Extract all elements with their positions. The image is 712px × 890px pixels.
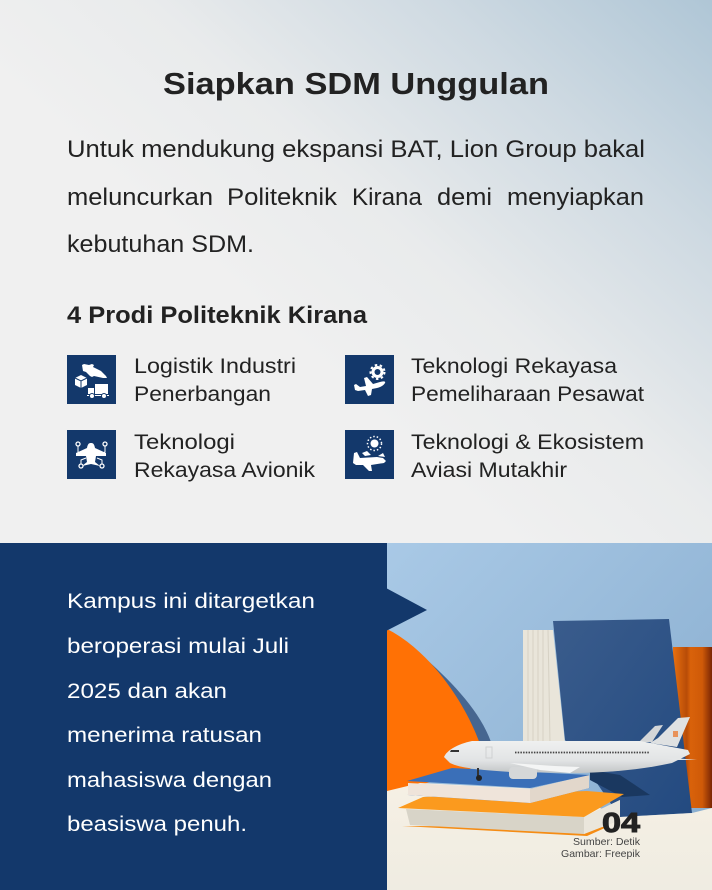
intro text block: Kirana xyxy=(352,184,422,211)
orange paper folds xyxy=(673,647,712,808)
label xyxy=(134,355,296,406)
label: Teknologi & Ekosistem xyxy=(411,431,644,454)
icon: plane, box and truck xyxy=(67,355,116,404)
source credits xyxy=(561,836,641,860)
heading: 4 prodi: 4 Prodi Politeknik Kirana xyxy=(67,302,368,329)
intro text block: Politeknik xyxy=(227,184,338,211)
callout text: 2025 dan akan xyxy=(67,679,227,703)
table xyxy=(387,783,712,890)
intro text block: Untuk mendukung ekspansi BAT, Lion Group bakal xyxy=(67,136,645,163)
item: Teknologi & Ekosistem Aviasi Mutakhir xyxy=(345,430,644,482)
item: Logistik Industri Penerbangan xyxy=(67,355,296,406)
airplane xyxy=(444,717,697,781)
photo wall xyxy=(387,543,712,890)
intro text block: meluncurkan xyxy=(67,184,213,211)
callout text xyxy=(67,589,315,836)
intro text block: demi xyxy=(437,184,492,211)
item: Teknologi Rekayasa Pemeliharaan Pesawat xyxy=(345,355,644,406)
label: Aviasi Mutakhir xyxy=(411,459,567,482)
callout arrow xyxy=(386,588,427,631)
icon: plane and light bulb xyxy=(345,430,394,479)
item: Teknologi Rekayasa Avionik xyxy=(67,430,316,482)
label: Rekayasa Avionik xyxy=(134,459,316,482)
page number: 04 xyxy=(602,807,641,838)
label: Penerbangan xyxy=(134,383,271,406)
label xyxy=(411,355,644,406)
photo: model plane on books xyxy=(387,543,712,890)
intro text block: menyiapkan xyxy=(507,184,644,211)
title: Siapkan SDM Unggulan xyxy=(163,66,549,101)
upper blue book xyxy=(407,768,590,803)
icon: plane and gear xyxy=(345,355,394,404)
label xyxy=(134,431,316,482)
label: Pemeliharaan Pesawat xyxy=(411,383,644,406)
orange arch with shadow xyxy=(387,629,491,795)
intro text block: kebutuhan SDM. xyxy=(67,231,254,258)
panel: navy callout xyxy=(0,543,427,890)
background: top panel xyxy=(0,0,712,543)
callout text: beasiswa penuh. xyxy=(67,812,247,836)
label: Teknologi xyxy=(134,431,235,454)
label: Logistik Industri xyxy=(134,355,296,378)
lower orange book xyxy=(398,791,624,836)
source credits: Sumber: Detik xyxy=(573,836,641,848)
callout text: mahasiswa dengan xyxy=(67,768,272,792)
program list xyxy=(67,355,644,482)
callout text: menerima ratusan xyxy=(67,723,262,747)
callout text: beroperasi mulai Juli xyxy=(67,634,289,658)
icon: plane with circuit lines xyxy=(67,430,116,479)
cream paper xyxy=(523,630,565,743)
navy book cover xyxy=(553,619,692,817)
label xyxy=(411,431,644,482)
label: Teknologi Rekayasa xyxy=(411,355,617,378)
intro text block xyxy=(67,136,645,258)
source credits: Gambar: Freepik xyxy=(561,848,641,860)
callout text: Kampus ini ditargetkan xyxy=(67,589,315,613)
